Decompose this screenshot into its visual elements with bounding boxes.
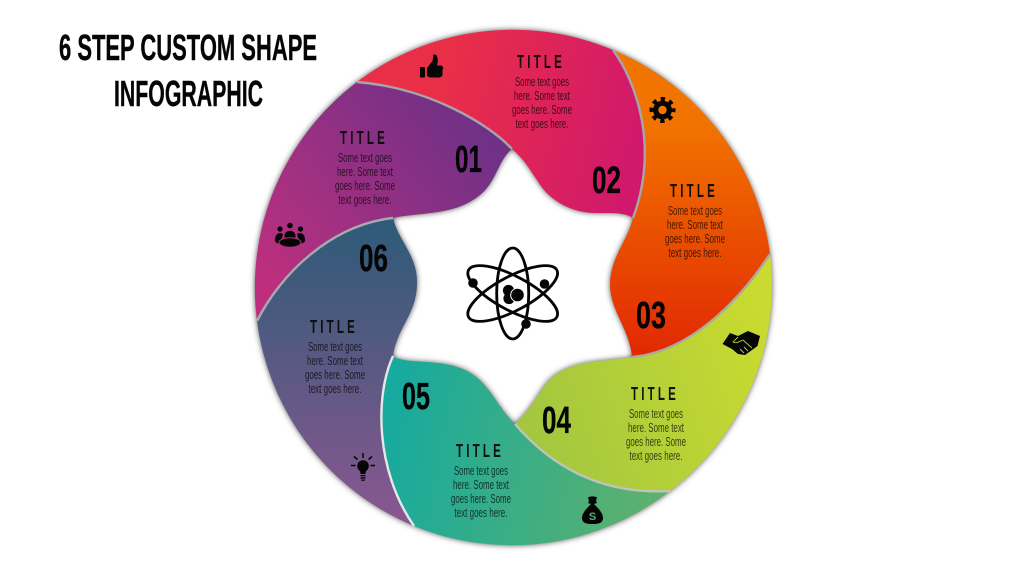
- step 04 text: TITLE: [631, 384, 679, 404]
- step 03 text: goes here. Some: [665, 232, 725, 246]
- panel: step 01: [255, 82, 512, 321]
- icon: people around table: [275, 223, 305, 247]
- step 05 text: text goes here.: [454, 506, 508, 520]
- icon: atom: [461, 248, 565, 339]
- title: INFOGRAPHIC: [114, 73, 263, 114]
- number 02: 02: [592, 160, 621, 202]
- number 06: 06: [359, 238, 388, 280]
- segment shape 06: [257, 218, 417, 526]
- step 06 text: TITLE: [310, 317, 358, 337]
- step 02 text: here. Some text: [514, 89, 570, 103]
- step 04 text: goes here. Some: [626, 435, 686, 449]
- segment shape 02: [357, 30, 645, 218]
- title: 6 STEP CUSTOM SHAPE: [59, 27, 317, 68]
- panel: step 02: [357, 30, 645, 218]
- step 02 text: Some text goes: [515, 75, 569, 89]
- step 01 text: Some text goes: [338, 151, 392, 165]
- step 05 text: Some text goes: [454, 464, 508, 478]
- number 03: 03: [636, 295, 666, 337]
- step 02 text: [512, 52, 572, 131]
- panel: step 05: [381, 356, 670, 545]
- title: [59, 27, 317, 114]
- step 04 text: [626, 384, 686, 463]
- panel: step 04: [515, 254, 772, 491]
- icon: thumbs up: [420, 54, 443, 78]
- segment shape 01: [255, 82, 512, 321]
- step 02 text: goes here. Some: [512, 103, 572, 117]
- step 04 text: here. Some text: [628, 421, 684, 435]
- step 01 text: here. Some text: [337, 165, 393, 179]
- icon: money bag: [582, 496, 603, 524]
- step 03 text: TITLE: [670, 181, 718, 201]
- step 06 text: goes here. Some: [305, 368, 365, 382]
- icon: money bag: S: [589, 511, 596, 523]
- icon: light bulb: [351, 453, 375, 481]
- step 01 text: [335, 128, 395, 207]
- step 01 text: text goes here.: [338, 193, 392, 207]
- step 04 text: Some text goes: [629, 407, 683, 421]
- step 04 text: text goes here.: [630, 449, 682, 463]
- panel: step 06: [257, 218, 417, 526]
- step 06 text: Some text goes: [308, 340, 362, 354]
- icon: gear: [652, 99, 673, 121]
- step 03 text: here. Some text: [667, 218, 723, 232]
- step 02 text: TITLE: [517, 52, 565, 72]
- step 03 text: text goes here.: [668, 246, 722, 260]
- segment shape 05: [381, 356, 670, 545]
- step 02 text: text goes here.: [516, 117, 568, 131]
- step 05 text: [451, 441, 511, 520]
- step 01 text: TITLE: [340, 128, 388, 148]
- number 04: 04: [542, 400, 571, 442]
- panel: step 03: [610, 50, 770, 357]
- step 06 text: here. Some text: [307, 354, 363, 368]
- number 05: 05: [402, 376, 430, 418]
- icon: handshake: [722, 331, 760, 355]
- step 03 text: [665, 181, 725, 260]
- segment shape 04: [515, 254, 772, 491]
- number 01: 01: [455, 139, 482, 181]
- step 03 text: Some text goes: [668, 204, 722, 218]
- step 05 text: here. Some text: [453, 478, 509, 492]
- segment shape 03: [610, 50, 770, 357]
- step 05 text: TITLE: [456, 441, 504, 461]
- step 06 text: text goes here.: [308, 382, 362, 396]
- step 01 text: goes here. Some: [335, 179, 395, 193]
- step 06 text: [305, 317, 365, 396]
- step 05 text: goes here. Some: [451, 492, 511, 506]
